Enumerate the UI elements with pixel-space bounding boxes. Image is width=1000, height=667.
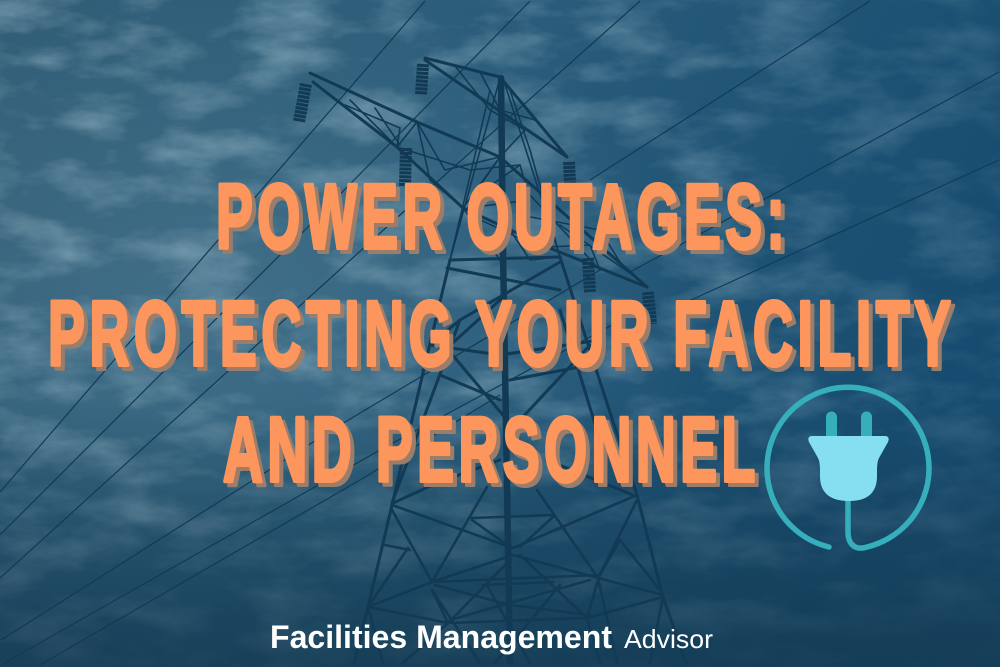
footer brand: Facilities Management <box>270 619 612 655</box>
tower legs and waist <box>354 257 686 663</box>
title: PROTECTING YOUR FACILITY <box>48 283 951 386</box>
title: POWER OUTAGES: <box>216 166 785 269</box>
icon: electric plug <box>767 387 929 548</box>
transmission tower <box>299 58 686 663</box>
tower mast <box>501 78 510 662</box>
title: AND PERSONNEL <box>223 399 755 502</box>
title: shadow layer: AND PERSONNEL <box>227 403 759 506</box>
title <box>48 166 951 502</box>
lower tower bracing <box>368 487 663 663</box>
icon: cord ring <box>767 387 929 548</box>
title: shadow layer: PROTECTING YOUR FACILITY <box>52 287 955 390</box>
icon: plug prongs <box>826 412 872 440</box>
icon: plug body <box>808 436 889 501</box>
title: shadow layer: POWER OUTAGES: <box>220 170 789 273</box>
footer brand: Advisor <box>624 624 713 654</box>
insulators <box>299 64 651 324</box>
cross arms <box>310 58 647 287</box>
cross arm lattice <box>345 66 640 280</box>
title: shadow layer <box>52 170 955 506</box>
